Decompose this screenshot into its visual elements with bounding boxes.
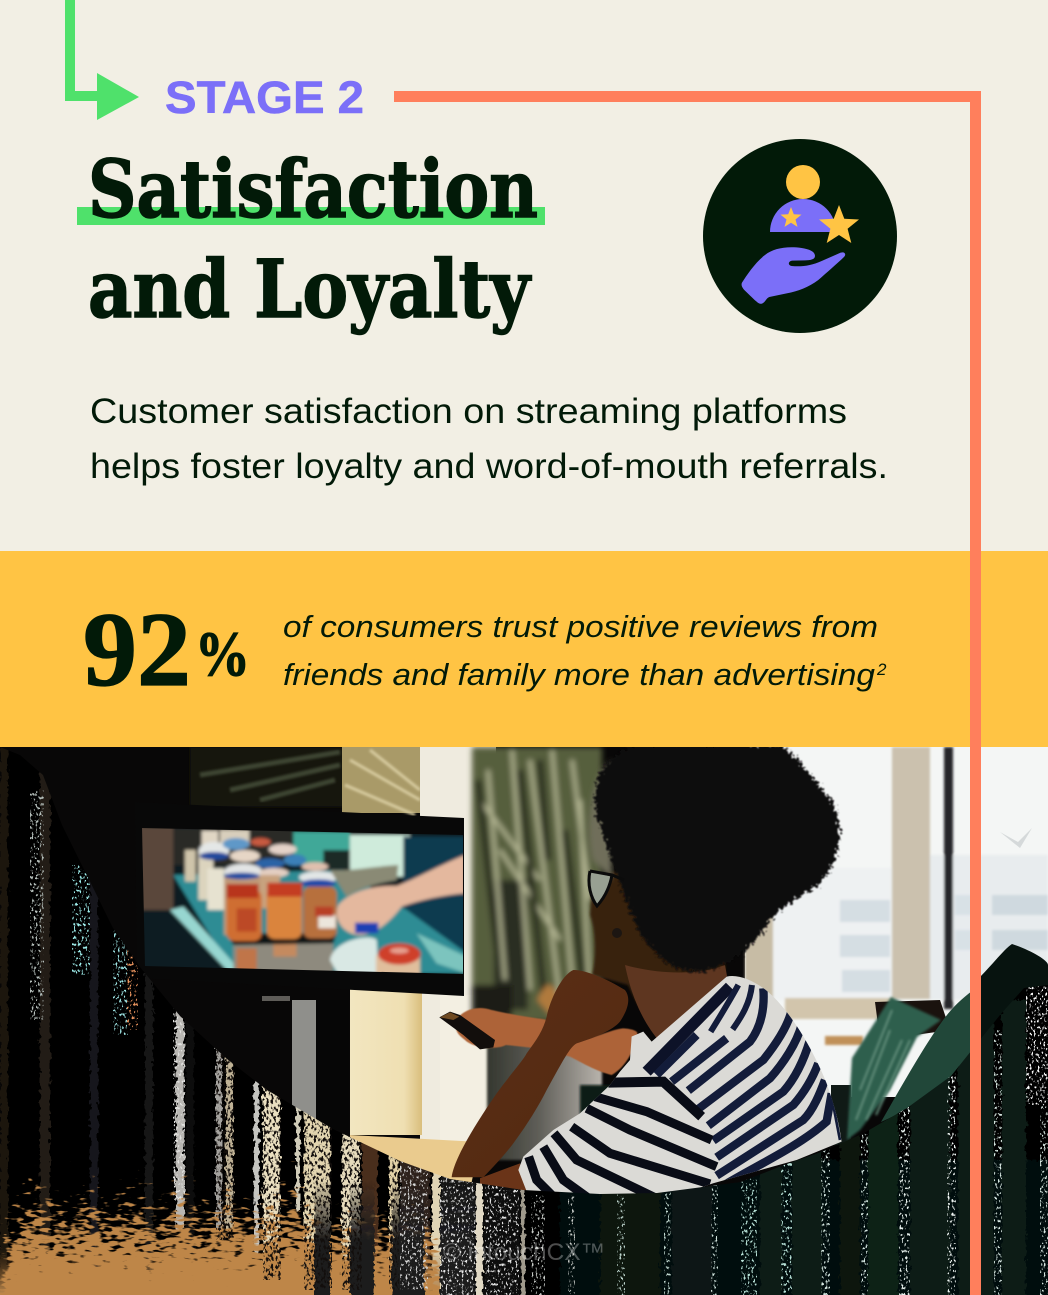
black flecks on pale stripes	[216, 1040, 399, 1290]
sleeve collar	[632, 1032, 644, 1038]
woman's hair	[589, 745, 840, 972]
intro text: helps foster loyalty and word-of-mouth referrals.	[90, 447, 888, 486]
left dark stripes	[0, 740, 8, 1295]
seagull	[1000, 828, 1032, 848]
window and city view	[580, 747, 1048, 1145]
title	[77, 142, 545, 336]
photo: woman watching television	[0, 740, 1048, 1295]
copyright watermark: © intouchCX™	[443, 1239, 605, 1266]
amber reflection	[0, 1250, 440, 1295]
woman's hand and near arm	[452, 970, 628, 1200]
intro text: Customer satisfaction on streaming platforms	[90, 392, 847, 431]
central pale stripes	[176, 1010, 184, 1230]
statistic description: 2	[876, 660, 887, 679]
orange connector line	[394, 91, 981, 1295]
panel: statistic band	[0, 551, 1048, 747]
title highlight underline	[77, 207, 545, 225]
statistic number: %	[195, 618, 250, 689]
statistic description	[283, 609, 887, 692]
television	[135, 802, 470, 1001]
right green stripes	[560, 1160, 1048, 1295]
woman's face and neck	[590, 871, 727, 1042]
glass highlights	[30, 790, 1048, 1295]
plant pot	[487, 1040, 602, 1160]
title line 1: Satisfaction	[88, 142, 538, 236]
hand and arm	[337, 855, 465, 935]
rippled glass foreground	[0, 740, 1048, 1295]
sofa and cushions	[847, 944, 1048, 1140]
statistic description: of consumers trust positive reviews from	[283, 609, 878, 644]
green connector arrow	[65, 0, 139, 120]
woman's far arm holding remote	[439, 1008, 637, 1075]
statistic number: 92	[83, 591, 191, 708]
statistic description: friends and family more than advertising	[283, 657, 875, 692]
striped shirt	[518, 976, 842, 1194]
icon: customer with stars in a hand	[703, 139, 897, 333]
front orange jars	[227, 889, 262, 941]
glass and red lid jar	[330, 937, 378, 975]
title line 2: and Loyalty	[88, 242, 532, 336]
back jars	[185, 850, 196, 882]
television picture	[142, 828, 463, 974]
intro text	[90, 392, 888, 486]
dark lower stripes	[314, 1180, 474, 1295]
statistic number	[83, 591, 250, 708]
amber mottling	[0, 1150, 440, 1295]
plant	[472, 747, 602, 1025]
room background	[0, 747, 896, 1292]
glasses	[589, 871, 624, 906]
stage label: STAGE 2	[165, 72, 364, 123]
